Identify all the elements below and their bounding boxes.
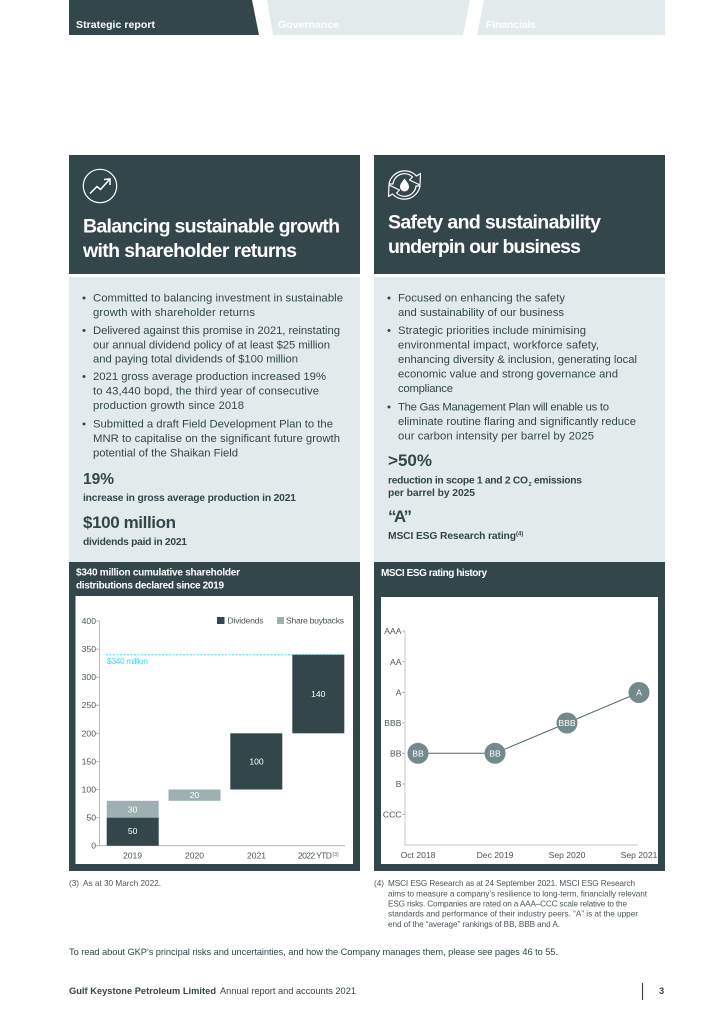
y axis: 150	[82, 756, 96, 766]
bullet list: safety: and sustainability of our business	[398, 307, 564, 319]
footer: 3	[659, 986, 664, 996]
bullet list: safety: Strategic priorities include minimising	[398, 325, 586, 337]
x axis labels: 2019	[123, 850, 142, 860]
rating axis: CCC	[383, 810, 402, 820]
footer	[69, 983, 664, 1000]
footnote 4: end of the “average” rankings of BB, BBB and A.	[388, 920, 560, 929]
bullet list: growth: 2021 gross average production increased 19%	[93, 371, 326, 383]
y axis: 200	[82, 728, 96, 738]
heading: safety: underpin our business	[388, 236, 581, 258]
bullet list: growth: MNR to capitalise on the significant future growth	[93, 433, 340, 445]
tab: Governance	[267, 0, 470, 35]
bullet list: growth: •	[82, 325, 86, 337]
tab: Financials: Financials	[486, 19, 536, 31]
reference line: $340 million: $340 million	[107, 656, 148, 666]
stat: "A" rating: “A”	[388, 507, 412, 526]
bar: 2020 buybacks 20	[168, 790, 220, 801]
rating axis: AAA	[384, 626, 402, 636]
risk note: To read about GKP’s principal risks and uncertainties, and how the Company manages them, please see pages 46 to 55.	[69, 947, 558, 957]
point: Sep 2020 BBB: BBB	[558, 718, 576, 728]
x axis labels: Oct 2018	[401, 850, 436, 860]
bullet list: safety: environmental impact, workforce safety,	[398, 340, 599, 352]
panel: shareholder distributions chart	[69, 562, 360, 871]
bullet list: growth: to 43,440 bopd, the third year of consecutive	[93, 386, 319, 398]
rating axis: B	[396, 779, 402, 789]
bar: 2021 dividends 100: 100	[249, 756, 264, 766]
panel: safety body	[374, 277, 665, 562]
bar: 2019 buybacks 30: 30	[128, 804, 138, 814]
footnote 4: (4)	[374, 879, 384, 888]
panel: safety header	[374, 155, 665, 274]
bullet list: growth	[82, 292, 343, 460]
x axis labels: Dec 2019	[477, 850, 514, 860]
navigation tabs	[69, 0, 665, 35]
bullet list: growth: •	[82, 418, 86, 430]
tab: Strategic report: Strategic report	[76, 19, 156, 31]
legend: Share buybacks	[286, 616, 344, 626]
bullet list: safety: our carbon intensity per barrel by 2025	[398, 430, 594, 442]
y axis: 250	[82, 700, 96, 710]
x axis labels	[401, 850, 658, 860]
stat: 19%: increase in gross average production in 2021	[83, 493, 296, 504]
bar: 2019 dividends 50	[107, 818, 159, 846]
footer: Gulf Keystone Petroleum Limited	[69, 986, 216, 996]
rating axis: BB	[390, 748, 402, 758]
footer: Annual report and accounts 2021	[220, 986, 356, 996]
legend	[217, 616, 344, 626]
stat: 19%	[83, 471, 296, 504]
stat: >50%: >50%	[388, 451, 432, 470]
bullet list: safety: enhancing diversity & inclusion, generating local	[398, 354, 637, 366]
icon: recycling arrows around drop	[388, 171, 420, 199]
heading: safety	[388, 212, 601, 258]
point: Dec 2019 BB	[484, 743, 506, 764]
bar: 2021 dividends 100	[230, 733, 282, 790]
panel: growth header	[69, 155, 360, 274]
bullet list: safety	[387, 292, 637, 442]
heading: safety: Safety and sustainability	[388, 212, 601, 234]
bullet list: growth: •	[82, 371, 86, 383]
bar: 2020 buybacks 20: 20	[190, 790, 199, 800]
stat: >50%	[388, 451, 582, 499]
bullet list: growth: our annual dividend policy of at least $25 million	[93, 340, 330, 352]
x axis labels: 2021	[247, 850, 266, 860]
y axis: 0	[91, 840, 96, 850]
panel: growth body	[69, 277, 360, 562]
x axis labels: Sep 2021	[621, 850, 658, 860]
footnote 3: As at 30 March 2022.	[83, 879, 161, 888]
bullet list: growth: potential of the Shaikan Field	[93, 448, 238, 460]
stat: "A" rating	[388, 507, 523, 542]
x axis labels	[123, 850, 339, 860]
chart title: distributions declared since 2019	[76, 580, 224, 592]
footnote 4: aims to measure a company’s resilience to long-term, financially relevant	[388, 890, 648, 898]
y axis	[82, 616, 345, 850]
icon: rising chart in circle	[83, 169, 117, 203]
bullet list: growth: production growth since 2018	[93, 400, 244, 412]
y axis: 50	[86, 812, 96, 822]
stat: >50%: reduction in scope 1 and 2 CO	[388, 476, 528, 486]
stat: $100 million: $100 million	[83, 513, 176, 532]
bullet list: safety: •	[387, 402, 391, 414]
chart title	[76, 568, 240, 592]
legend: Dividends	[228, 616, 264, 626]
y axis: 300	[82, 672, 96, 682]
footnote 4: standards and performance of their industry peers. “A” is at the upper	[388, 910, 638, 918]
bullet list: growth: Delivered against this promise in 2021, reinstating	[93, 325, 340, 337]
chart title: $340 million cumulative shareholder	[76, 568, 240, 578]
point: Sep 2021 A: A	[636, 688, 642, 698]
x axis labels: 2022 YTD	[298, 850, 332, 860]
footnote 4	[374, 879, 648, 929]
bar: 2022 YTD dividends 140: 140	[311, 689, 326, 699]
heading: growth: with shareholder returns	[82, 240, 297, 262]
stat: >50%: per barrel by 2025	[388, 488, 475, 499]
bullet list: safety: economic value and strong governance and	[398, 368, 618, 380]
footnote 4: ESG risks. Companies are rated on a AAA–CCC scale relative to the	[388, 900, 627, 908]
rating axis: A	[396, 688, 402, 698]
bullet list: growth: and paying total dividends of $100 million	[93, 354, 298, 366]
bullet list: growth: Submitted a draft Field Development Plan to the	[93, 418, 333, 430]
rating line	[418, 692, 639, 753]
point: Sep 2021 A	[628, 682, 650, 703]
stat: >50%: 2	[528, 482, 532, 488]
bar: 2019 buybacks 30	[107, 801, 159, 818]
y axis: 400	[82, 616, 96, 626]
point: Oct 2018 BB	[408, 743, 428, 764]
rating axis: BBB	[384, 718, 402, 728]
rating axis: AA	[390, 657, 402, 667]
bullet list: safety: eliminate routine flaring and significantly reduce	[398, 416, 636, 428]
bullet list: growth: •	[82, 292, 86, 304]
stat: "A" rating: MSCI ESG Research rating	[388, 531, 516, 542]
heading: growth	[82, 216, 340, 262]
bullet list: safety: The Gas Management Plan will enable us to	[398, 402, 609, 414]
bullet list: safety: Focused on enhancing the safety	[398, 292, 565, 304]
chart title: MSCI ESG rating history	[381, 568, 487, 579]
x axis labels: 2020	[185, 850, 204, 860]
bullet list: safety: compliance	[398, 383, 453, 395]
tab: Strategic report	[69, 0, 259, 35]
tab: Governance: Governance	[278, 19, 339, 31]
bullet list: safety: •	[387, 292, 391, 304]
rating axis	[383, 626, 638, 845]
footnote 3: (3)	[69, 879, 79, 888]
y axis: 350	[82, 644, 96, 654]
heading: growth: Balancing sustainable growth	[83, 216, 340, 238]
bullet list: safety: •	[387, 325, 391, 337]
stat: $100 million: dividends paid in 2021	[83, 537, 187, 548]
tab: Financials	[477, 0, 665, 35]
panel: MSCI ESG rating history chart	[374, 562, 665, 871]
point: Sep 2020 BBB	[556, 712, 578, 734]
point: Dec 2019 BB: BB	[489, 748, 501, 758]
stat: >50%: emissions	[534, 476, 582, 486]
stat: $100 million	[83, 513, 187, 548]
stat: 19%: 19%	[83, 471, 114, 488]
bar: 2019 dividends 50: 50	[128, 826, 138, 836]
bullet list: growth: growth with shareholder returns	[93, 307, 255, 319]
stat: "A" rating: (4)	[516, 532, 523, 538]
point: Oct 2018 BB: BB	[412, 748, 424, 758]
bar: 2022 YTD dividends 140	[292, 655, 344, 733]
y axis: 100	[82, 784, 96, 794]
footnote 4: MSCI ESG Research as at 24 September 2021. MSCI ESG Research	[388, 879, 635, 888]
x axis labels: (3)	[332, 852, 339, 858]
x axis labels: Sep 2020	[549, 850, 586, 860]
bullet list: growth: Committed to balancing investment in sustainable	[93, 292, 343, 304]
